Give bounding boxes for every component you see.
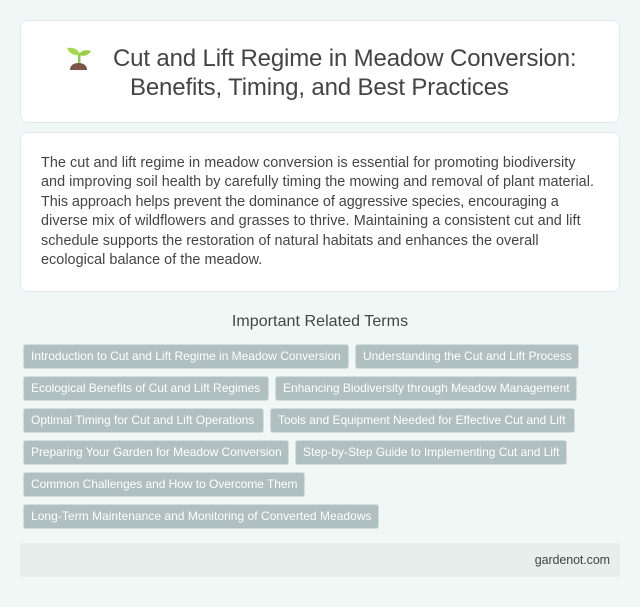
summary text: schedule supports the restoration of natural habitats and enhances the overall	[41, 233, 539, 249]
panel: summary card	[20, 132, 620, 292]
tag: Common Challenges and How to Overcome Them	[31, 477, 297, 491]
icon: seedling	[67, 48, 91, 70]
tag: Optimal Timing for Cut and Lift Operations	[31, 413, 254, 427]
tag: Step-by-Step Guide to Implementing Cut and Lift	[303, 445, 559, 459]
tag	[23, 472, 305, 497]
tag: Preparing Your Garden for Meadow Conversion	[31, 445, 282, 459]
tag	[270, 408, 575, 433]
summary text: and improving soil health by carefully timing the mowing and removal of plant material.	[41, 174, 594, 190]
summary text	[41, 155, 594, 268]
tag	[23, 344, 349, 369]
summary text: diverse mix of wildflowers and grasses to thrive. Maintaining a consistent cut and lift	[41, 213, 581, 229]
tag: Tools and Equipment Needed for Effective Cut and Lift	[278, 413, 566, 427]
summary text: This approach helps prevent the dominance of aggressive species, encouraging a	[41, 194, 559, 210]
tag	[23, 376, 269, 401]
tag: Ecological Benefits of Cut and Lift Regimes	[31, 381, 260, 395]
tag: Understanding the Cut and Lift Process	[363, 349, 572, 363]
related terms tags	[23, 344, 579, 529]
footer bar	[20, 543, 620, 577]
summary text: The cut and lift regime in meadow conversion is essential for promoting biodiversity	[41, 155, 576, 171]
tag	[275, 376, 577, 401]
tag	[23, 504, 379, 529]
tag: Enhancing Biodiversity through Meadow Management	[283, 381, 570, 395]
summary text: ecological balance of the meadow.	[41, 252, 262, 268]
footer source: gardenot.com	[535, 553, 610, 567]
title	[113, 45, 576, 101]
panel: title card	[20, 20, 620, 123]
title line 1: Cut and Lift Regime in Meadow Conversion:	[113, 45, 576, 72]
tag	[23, 440, 289, 465]
tag	[295, 440, 567, 465]
tag	[355, 344, 579, 369]
tag: Long-Term Maintenance and Monitoring of Converted Meadows	[31, 509, 372, 523]
tag	[23, 408, 264, 433]
title line 2: Benefits, Timing, and Best Practices	[130, 74, 509, 101]
heading: related terms: Important Related Terms	[232, 313, 408, 330]
tag: Introduction to Cut and Lift Regime in Meadow Conversion	[31, 349, 341, 363]
